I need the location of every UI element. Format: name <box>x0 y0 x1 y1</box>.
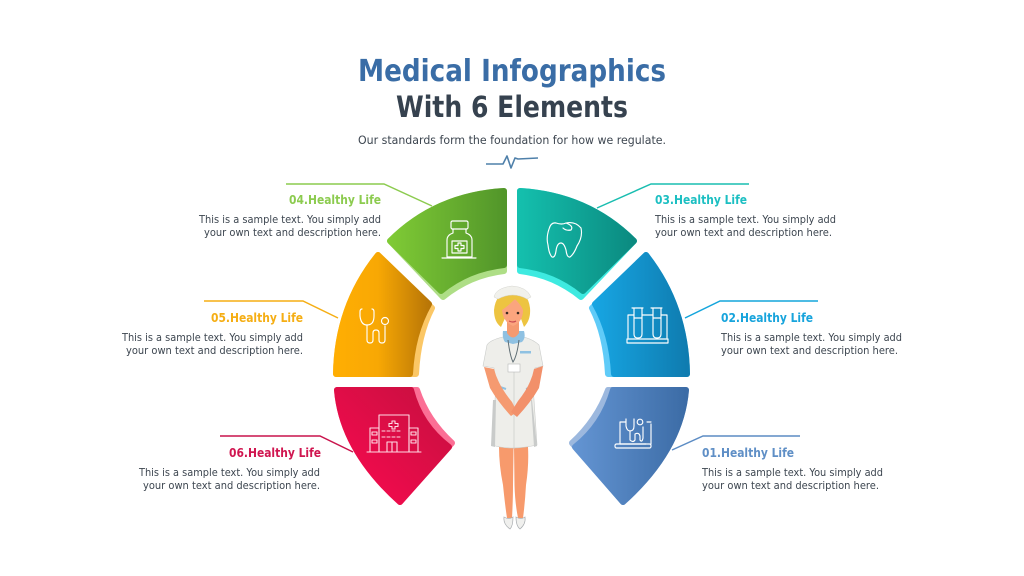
text block: 06 <box>138 446 321 492</box>
title: With 6 Elements <box>396 90 628 124</box>
text block: 03: This is a sample text. You simply add <box>654 213 836 226</box>
callout line: 06 <box>220 436 353 452</box>
chest pocket <box>520 351 531 354</box>
text block: 02: 02.Healthy Life <box>721 311 813 325</box>
text block: 01 <box>701 446 883 492</box>
text block: 04: 04.Healthy Life <box>289 193 381 207</box>
panel: 06 red segment <box>337 390 452 502</box>
shoes <box>504 517 513 529</box>
icon: medicine bottle <box>442 221 476 258</box>
text block: 01: 01.Healthy Life <box>702 446 794 460</box>
cap <box>494 286 531 299</box>
text block: 06: This is a sample text. You simply add <box>138 466 320 479</box>
icon: stethoscope <box>360 309 388 343</box>
title: Medical Infographics <box>358 54 666 89</box>
text block: 04: your own text and description here. <box>204 226 381 239</box>
lanyard and badge <box>508 340 519 362</box>
icon: test tubes <box>627 308 668 343</box>
text block: 05: 05.Healthy Life <box>211 311 303 325</box>
panel: 04 green segment <box>390 191 504 297</box>
text block: 05: your own text and description here. <box>126 344 303 357</box>
text block: 04: This is a sample text. You simply add <box>198 213 381 226</box>
icon: hospital <box>367 415 421 452</box>
text block: 01: your own text and description here. <box>702 479 879 492</box>
face <box>502 299 523 326</box>
text block: 03: 03.Healthy Life <box>655 193 747 207</box>
callout line: 02 <box>685 301 818 318</box>
pockets <box>500 387 532 389</box>
text block: 02: your own text and description here. <box>721 344 898 357</box>
legs <box>499 447 514 518</box>
text block: 06: 06.Healthy Life <box>229 446 321 460</box>
text block: 04 <box>198 193 381 239</box>
text block: 01: This is a sample text. You simply add <box>701 466 883 479</box>
panel: 01 dark blue segment <box>572 390 686 502</box>
icon: tooth <box>547 223 582 257</box>
nurse figure <box>483 286 543 529</box>
callout line: 01 <box>672 436 800 450</box>
hair <box>494 291 530 327</box>
text block: 05: This is a sample text. You simply add <box>121 331 303 344</box>
text block: 03: your own text and description here. <box>655 226 832 239</box>
text block: 02: This is a sample text. You simply add <box>720 331 902 344</box>
text block: 03 <box>654 193 836 239</box>
text block: 05 <box>121 311 303 357</box>
callout line: 04 <box>286 184 432 206</box>
icon: laptop with stethoscope <box>615 419 651 448</box>
callout line: 05 <box>204 301 338 318</box>
callout line: 03 <box>597 184 749 208</box>
icon: heartbeat line <box>486 156 538 168</box>
text block: 06: your own text and description here. <box>143 479 320 492</box>
collar <box>503 331 525 344</box>
subtitle: Our standards form the foundation for how we regulate. <box>358 133 666 147</box>
panel: 03 teal segment <box>520 191 634 297</box>
panel: 02 blue segment <box>592 255 687 374</box>
text block: 02 <box>720 311 902 357</box>
dress <box>483 337 543 448</box>
title <box>358 54 666 124</box>
neck <box>507 322 519 338</box>
arms <box>484 367 517 416</box>
panel: 05 orange segment <box>336 255 432 374</box>
